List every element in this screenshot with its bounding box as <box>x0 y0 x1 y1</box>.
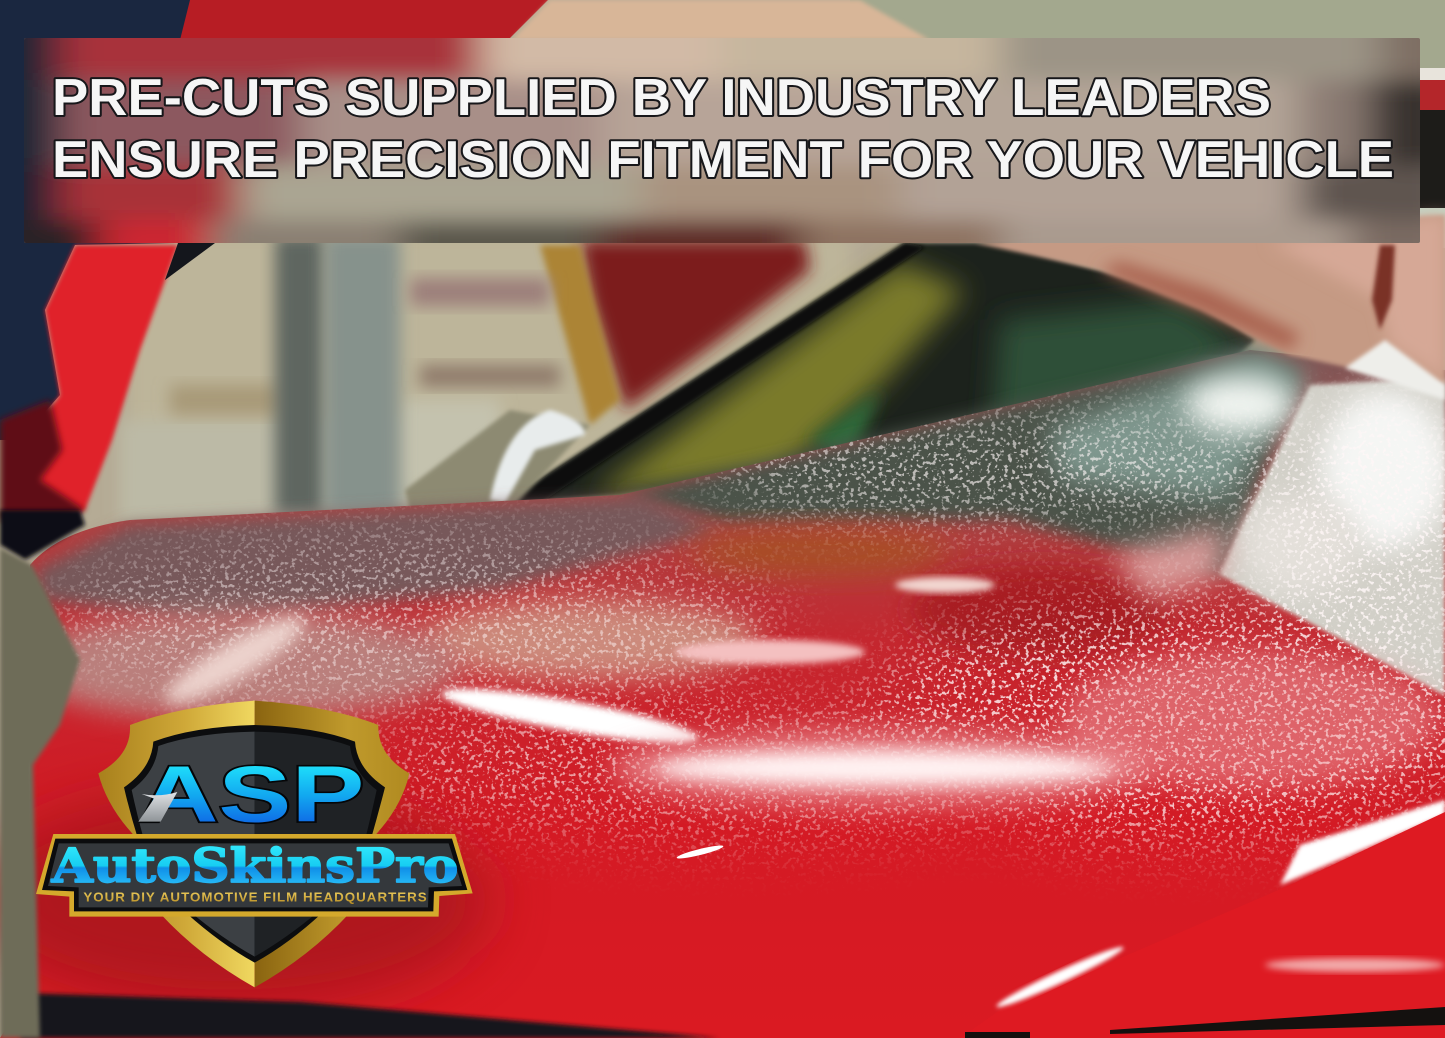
workshop background <box>120 0 1445 525</box>
water speckles <box>42 374 1445 888</box>
ASP monogram: ASP <box>139 749 364 838</box>
hood <box>0 350 1445 1038</box>
glare streaks on hood <box>157 577 1445 885</box>
lifted protective film <box>1219 378 1445 696</box>
headline text <box>52 69 1394 189</box>
name ribbon <box>36 834 473 917</box>
shield <box>98 701 409 987</box>
headline text: PRE-CUTS SUPPLIED BY INDUSTRY LEADERS <box>52 69 1271 127</box>
film lower edge <box>960 812 1445 1038</box>
headline text: ENSURE PRECISION FITMENT FOR YOUR VEHICLE <box>52 131 1394 189</box>
brand name: AutoSkinsPro <box>51 839 458 894</box>
tagline: YOUR DIY AUTOMOTIVE FILM HEADQUARTERS <box>83 889 427 904</box>
technician forearm and hand <box>975 40 1445 400</box>
headline banner <box>24 38 1420 243</box>
AutoSkinsPro logo badge <box>36 701 473 987</box>
technician sleeve and jacket <box>0 0 930 1038</box>
bottom of hood <box>20 993 720 1038</box>
banner frosted background <box>24 38 1420 243</box>
windshield <box>405 243 1255 512</box>
